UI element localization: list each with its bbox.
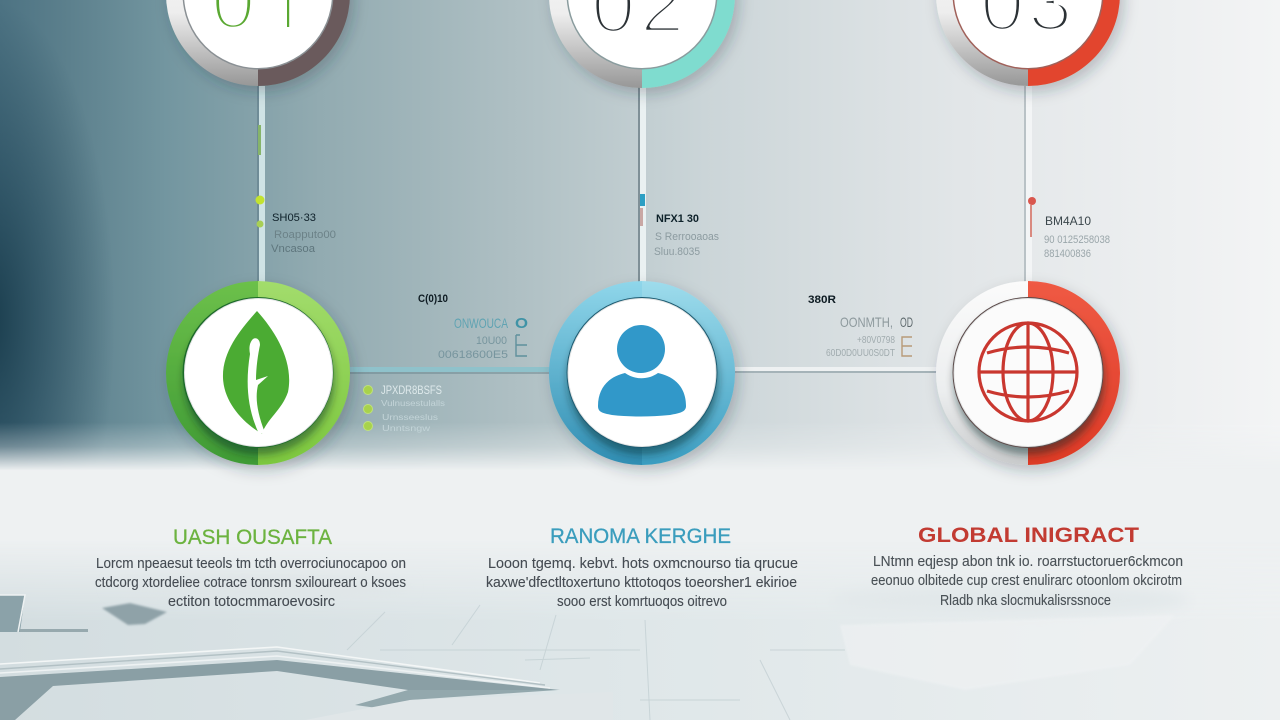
body: column 3: Rladb nka slocmukalisrssnoce <box>940 592 1111 609</box>
bullet dots <box>364 386 372 430</box>
callout 1 above horizontal connector: C(0)10 <box>418 293 448 305</box>
callout 1 above horizontal connector: O <box>515 315 528 332</box>
small label group 3: 90 0125258038 <box>1044 234 1110 246</box>
small label group 1: SH05·33 <box>272 212 316 224</box>
body: column 3: LNtmn eqjesp abon tnk io. roarrstuctoruer6ckmcon <box>873 553 1183 570</box>
callout 2 above horizontal connector: OD <box>900 314 913 330</box>
body: column 2: sooo erst komrtuoqos oitrevo <box>557 593 727 610</box>
small label group 2: Sluu.8035 <box>654 246 700 258</box>
bullet text: Urnsseeslus <box>382 413 438 422</box>
red marker dot on connector 3 <box>1028 197 1036 205</box>
callout 1 above horizontal connector: ONWOUCA <box>454 315 508 331</box>
horizontal connector 2 <box>735 367 937 373</box>
top badge 02 <box>549 0 735 88</box>
callout 2 above horizontal connector: +80V0798 <box>857 335 895 346</box>
small label group 3: 881400836 <box>1044 248 1091 260</box>
heading: column 2: RANOMA KERGHE <box>550 525 731 548</box>
top badge 03 <box>936 0 1120 86</box>
bullet text: Vulnusestulalls <box>381 399 445 408</box>
text block: column 1 <box>95 526 406 610</box>
callout 2 above horizontal connector: OONMTH, <box>840 314 893 330</box>
small label group 3 <box>1044 214 1110 260</box>
body: column 2: kaxwe'dfectltoxertuno kttotoqos toeorsher1 ekirioe <box>486 574 797 591</box>
green bullet list <box>364 383 445 433</box>
background: floor with perspective shapes <box>0 565 1176 720</box>
callout 1 above horizontal connector: 00618600E5 <box>438 349 508 361</box>
background: dark gradient wall <box>0 0 1034 469</box>
small label group 1 <box>271 212 336 255</box>
bottom badge: person <box>549 281 735 465</box>
bottom badge: globe <box>936 281 1120 465</box>
small label group 2 <box>654 213 719 258</box>
green marker dots on connector 1 <box>256 196 264 228</box>
body: column 2: Looon tgemq. kebvt. hots oxmcnourso tia qrucue <box>488 555 798 572</box>
bullet text: JPXDR8BSFS <box>381 383 442 397</box>
text block: column 3 <box>871 524 1183 609</box>
callout 1 above horizontal connector: 10U00 <box>476 335 507 347</box>
connector lines <box>257 86 1032 374</box>
icon: globe <box>979 323 1077 421</box>
vertical connector 2 <box>638 86 646 282</box>
icon: person <box>598 325 686 416</box>
callout 2 above horizontal connector <box>808 294 913 359</box>
body: column 3: eeonuo olbitede cup crest enulirarc otoonlom okcirotm <box>871 572 1182 589</box>
bullet text: Unntsngw <box>382 424 430 433</box>
small label group 2: S Rerrooaoas <box>655 231 719 243</box>
heading: column 1: UASH OUSAFTA <box>173 526 332 549</box>
horizontal connector 1 <box>350 367 552 374</box>
callout 1 above horizontal connector <box>418 293 528 361</box>
small label group 3: BM4A10 <box>1045 214 1091 228</box>
body: column 2 <box>486 555 798 610</box>
small label group 1: Roapputo00 <box>274 229 336 241</box>
vertical connector 3 <box>1024 86 1032 282</box>
body: column 1: Lorcm npeaesut teeols tm tcth overrociunocapoo on <box>96 555 406 572</box>
body: column 1 <box>95 555 406 610</box>
bottom badge: leaf <box>166 281 350 465</box>
body: column 3 <box>871 553 1183 609</box>
heading: column 3: GLOBAL INIGRACT <box>918 524 1139 547</box>
small label group 2: NFX1 30 <box>656 213 699 225</box>
icon: leaf <box>223 311 289 434</box>
callout 2 above horizontal connector: 60D0D0UU0S0DT <box>826 348 895 359</box>
vertical connector 1 <box>257 86 265 282</box>
top badge 01 <box>166 0 350 86</box>
body: column 1: ctdcorg xtordeliee cotrace tonrsm sxiloureart o ksoes <box>95 574 406 591</box>
small label group 1: Vncasoa <box>271 243 316 255</box>
text block: column 2 <box>486 525 798 610</box>
body: column 1: ectiton totocmmaroevosirc <box>168 593 335 610</box>
bullet text <box>381 383 445 433</box>
callout 2 above horizontal connector: 380R <box>808 294 836 306</box>
